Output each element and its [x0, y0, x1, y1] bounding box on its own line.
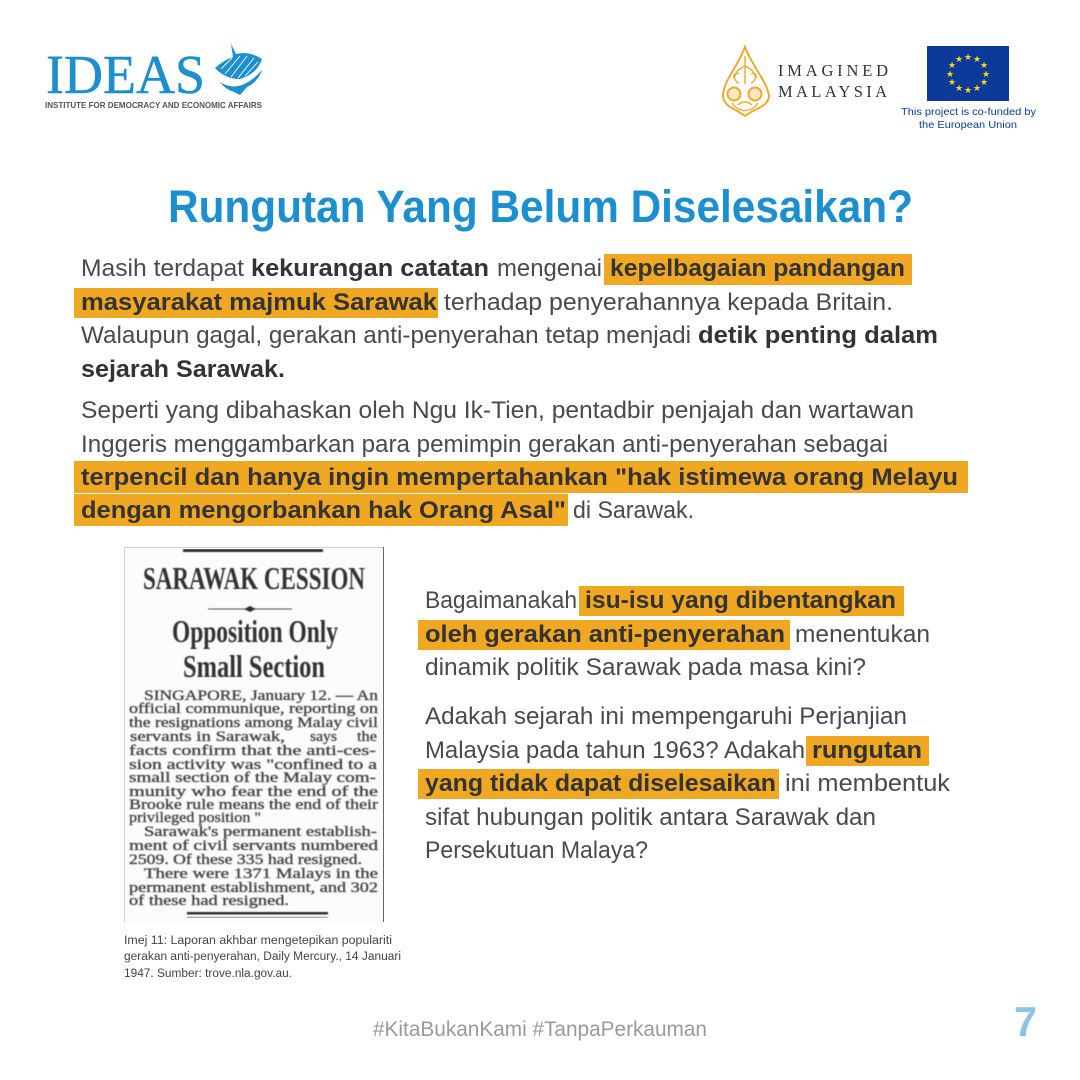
newspaper clipping: ment of civil servants numbered: [129, 838, 379, 854]
text block: first paragraph: sejarah Sarawak.: [81, 356, 285, 383]
logo: IDEAS: IDEAS: [46, 44, 205, 105]
text block: first paragraph: [74, 254, 938, 383]
logo: EU flag with co-funding note: ★: [973, 54, 981, 64]
text block: second question: Adakah sejarah ini mempengaruhi Perjanjian: [425, 703, 907, 730]
text block: second question: [418, 703, 951, 864]
newspaper clipping: facts confirm that the anti-ces-: [129, 743, 376, 759]
text block: second paragraph: dengan mengorbankan hak Orang Asal": [81, 497, 566, 524]
newspaper clipping: SARAWAK CESSION: [143, 560, 365, 596]
text block: first paragraph: terhadap penyerahannya kepada Britain.: [444, 289, 893, 316]
text block: first question: Bagaimanakah: [425, 587, 577, 614]
newspaper clipping: says: [310, 729, 337, 745]
text block: first paragraph: kepelbagaian pandangan: [610, 255, 905, 282]
newspaper clipping: small section of the Malay com-: [129, 770, 376, 786]
text block: first question: oleh gerakan anti-penyerahan: [425, 621, 785, 648]
newspaper clipping: Opposition Only: [172, 613, 338, 649]
text block: first paragraph: detik penting dalam: [698, 322, 938, 349]
newspaper clipping: Small Section: [183, 648, 325, 684]
logo: EU flag with co-funding note: ★: [948, 60, 956, 70]
logo: EU flag with co-funding note: ★: [964, 52, 972, 62]
logo: IDEAS: INSTITUTE FOR DEMOCRACY AND ECONOMIC AFFAIRS: [45, 100, 262, 110]
text block: first paragraph: Walaupun gagal, gerakan anti-penyerahan tetap menjadi: [81, 322, 691, 349]
text block: second paragraph: Seperti yang dibahaskan oleh Ngu Ik-Tien, pentadbir penjajah dan wartawan: [81, 397, 914, 424]
text block: second paragraph: di Sarawak.: [573, 497, 694, 524]
newspaper clipping: Brooke rule means the end of their: [129, 797, 378, 813]
newspaper clipping: permanent establishment, and 302: [129, 880, 378, 896]
text block: second question: yang tidak dapat diselesaikan: [425, 770, 776, 797]
logo: EU flag with co-funding note: ★: [980, 60, 988, 70]
newspaper clipping: servants in Sarawak,: [130, 729, 285, 745]
newspaper clipping: privileged position ": [129, 810, 261, 826]
text block: first paragraph: mengenai: [497, 255, 602, 282]
logo: EU flag with co-funding note: [901, 46, 1037, 131]
text block: second question: sifat hubungan politik antara Sarawak dan: [425, 804, 876, 831]
text block: second paragraph: Inggeris menggambarkan para pemimpin gerakan anti-penyerahan sebagai: [81, 431, 888, 458]
logo: Imagined Malaysia: MALAYSIA: [778, 82, 887, 101]
text block: second question: ini membentuk: [785, 770, 951, 797]
text block: second question: Malaysia pada tahun 1963? Adakah: [425, 737, 805, 764]
text block: first question: menentukan: [795, 621, 930, 648]
newspaper clipping: There were 1371 Malays in the: [144, 866, 378, 882]
text block: first paragraph: masyarakat majmuk Sarawak: [81, 289, 438, 316]
text block: first question: isu-isu yang dibentangkan: [585, 587, 896, 614]
image caption: 1947. Sumber: trove.nla.gov.au.: [124, 968, 292, 980]
logo: EU flag with co-funding note: ★: [964, 85, 972, 95]
logo: EU flag with co-funding note: ★: [955, 54, 963, 64]
newspaper clipping: SINGAPORE, January 12. — An: [144, 688, 379, 704]
logo: EU flag with co-funding note: ★: [946, 69, 954, 79]
newspaper clipping: munity who fear the end of the: [129, 784, 378, 800]
logo: EU flag with co-funding note: the European Union: [919, 119, 1017, 131]
image caption: gerakan anti-penyerahan, Daily Mercury., 14 Januari: [124, 951, 401, 963]
logo: EU flag with co-funding note: ★: [955, 83, 963, 93]
newspaper clipping: official communique, reporting on: [129, 701, 379, 717]
newspaper clipping: Sarawak's permanent establish-: [144, 824, 377, 840]
logo: IDEAS: [45, 44, 262, 110]
logo: EU flag with co-funding note: ★: [982, 69, 990, 79]
image caption: Imej 11: Laporan akhbar mengetepikan populariti: [124, 935, 392, 947]
logo: Imagined Malaysia: [723, 47, 888, 116]
newspaper clipping: 2509. Of these 335 had resigned.: [129, 852, 362, 868]
newspaper clipping: sion activity was "confined to a: [129, 757, 378, 773]
logo: EU flag with co-funding note: ★: [973, 83, 981, 93]
text block: second question: rungutan: [812, 737, 922, 764]
newspaper clipping: of these had resigned.: [129, 893, 289, 909]
newspaper clipping: the resignations among Malay civil: [129, 715, 378, 731]
page number: 7: [1014, 998, 1037, 1045]
logo: EU flag with co-funding note: This project is co-funded by: [901, 106, 1037, 118]
text block: second paragraph: [74, 397, 968, 526]
logo: EU flag with co-funding note: ★: [980, 77, 988, 87]
title: Rungutan Yang Belum Diselesaikan?: [168, 181, 913, 232]
image caption: [124, 935, 401, 980]
text block: second paragraph: terpencil dan hanya ingin mempertahankan "hak istimewa orang Melayu: [81, 464, 958, 491]
hashtags: #KitaBukanKami #TanpaPerkauman: [373, 1018, 707, 1041]
newspaper clipping: the: [357, 729, 377, 745]
newspaper clipping: [124, 547, 384, 922]
text block: second question: Persekutuan Malaya?: [425, 837, 648, 864]
text block: first paragraph: kekurangan catatan: [251, 255, 489, 282]
logo: EU flag with co-funding note: ★: [948, 77, 956, 87]
text block: first paragraph: Masih terdapat: [81, 255, 244, 282]
text block: first question: [418, 586, 930, 681]
logo: Imagined Malaysia: IMAGINED: [778, 61, 888, 80]
text block: first question: dinamik politik Sarawak pada masa kini?: [425, 654, 866, 681]
